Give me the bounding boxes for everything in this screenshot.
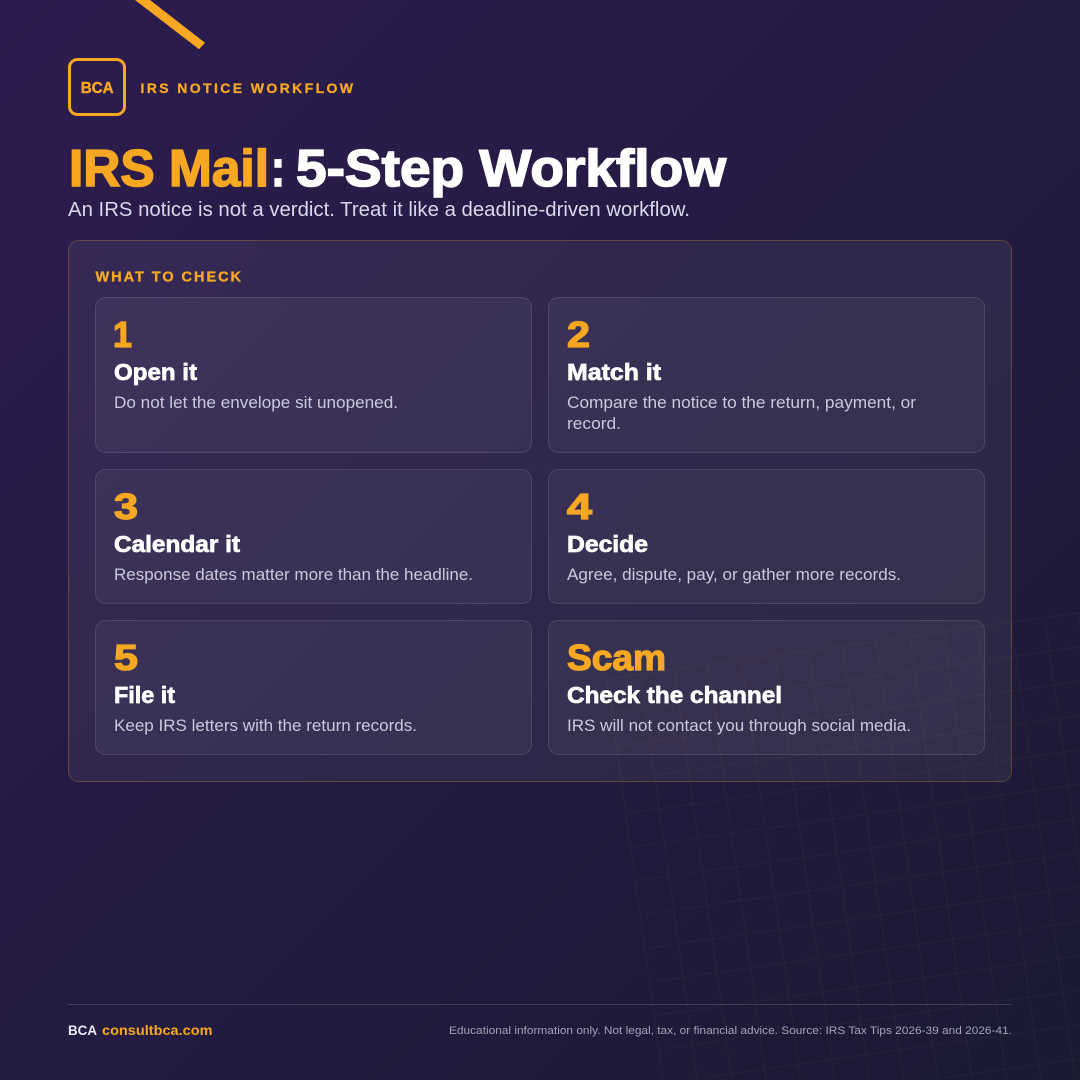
- card: scam check: [548, 620, 984, 754]
- card: step 3: 3: [114, 486, 138, 527]
- card: step 1: Do not let the envelope sit unopened.: [114, 393, 398, 412]
- icon: BCA logo: [70, 60, 124, 114]
- title: :: [271, 140, 285, 198]
- header: logo and eyebrow: [70, 60, 354, 114]
- card: scam check: Scam: [567, 637, 666, 678]
- card: scam check: IRS will not contact you through social media.: [567, 716, 911, 735]
- card: scam check: Check the channel: [567, 682, 782, 708]
- card: step 2: [548, 298, 984, 452]
- card: step 4: Decide: [567, 531, 648, 557]
- card: step 5: File it: [114, 682, 175, 708]
- card: step 4: 4: [567, 486, 592, 527]
- title: [69, 140, 727, 198]
- decorative orange diagonal bar: [135, 0, 205, 49]
- card: step 4: [548, 470, 984, 604]
- title: 5-Step Workflow: [296, 140, 727, 198]
- card: step 5: 5: [114, 637, 138, 678]
- card: step 5: Keep IRS letters with the return records.: [114, 716, 417, 735]
- title: IRS Mail: [69, 140, 269, 198]
- icon: BCA logo: BCA: [81, 80, 114, 97]
- footer brand: consultbca.com: [102, 1022, 212, 1038]
- card: step 3: Calendar it: [114, 531, 240, 557]
- eyebrow label: IRS NOTICE WORKFLOW: [140, 80, 354, 96]
- card: step 4: Agree, dispute, pay, or gather more records.: [567, 565, 901, 584]
- card: step 2: Compare the notice to the return, payment, or: [567, 393, 916, 412]
- card: step 3: Response dates matter more than the headline.: [114, 565, 473, 584]
- panel: what to check: [68, 240, 1012, 782]
- card: step 2: 2: [567, 314, 590, 355]
- card: step 2: record.: [567, 414, 621, 433]
- footer: [68, 1022, 1012, 1038]
- subtitle: An IRS notice is not a verdict. Treat it like a deadline-driven workflow.: [68, 198, 690, 221]
- card: step 1: 1: [113, 314, 132, 355]
- footer disclaimer: Educational information only. Not legal, tax, or financial advice. Source: IRS Tax Tips 2026-39 and 2026-41.: [449, 1025, 1012, 1037]
- card: step 2: Match it: [567, 359, 661, 385]
- card: step 5: [96, 620, 532, 754]
- card: step 1: Open it: [114, 359, 197, 385]
- footer brand: BCA: [68, 1022, 97, 1038]
- panel heading: WHAT TO CHECK: [96, 270, 242, 286]
- card: step 1: [96, 298, 532, 452]
- card: step 3: [96, 470, 532, 604]
